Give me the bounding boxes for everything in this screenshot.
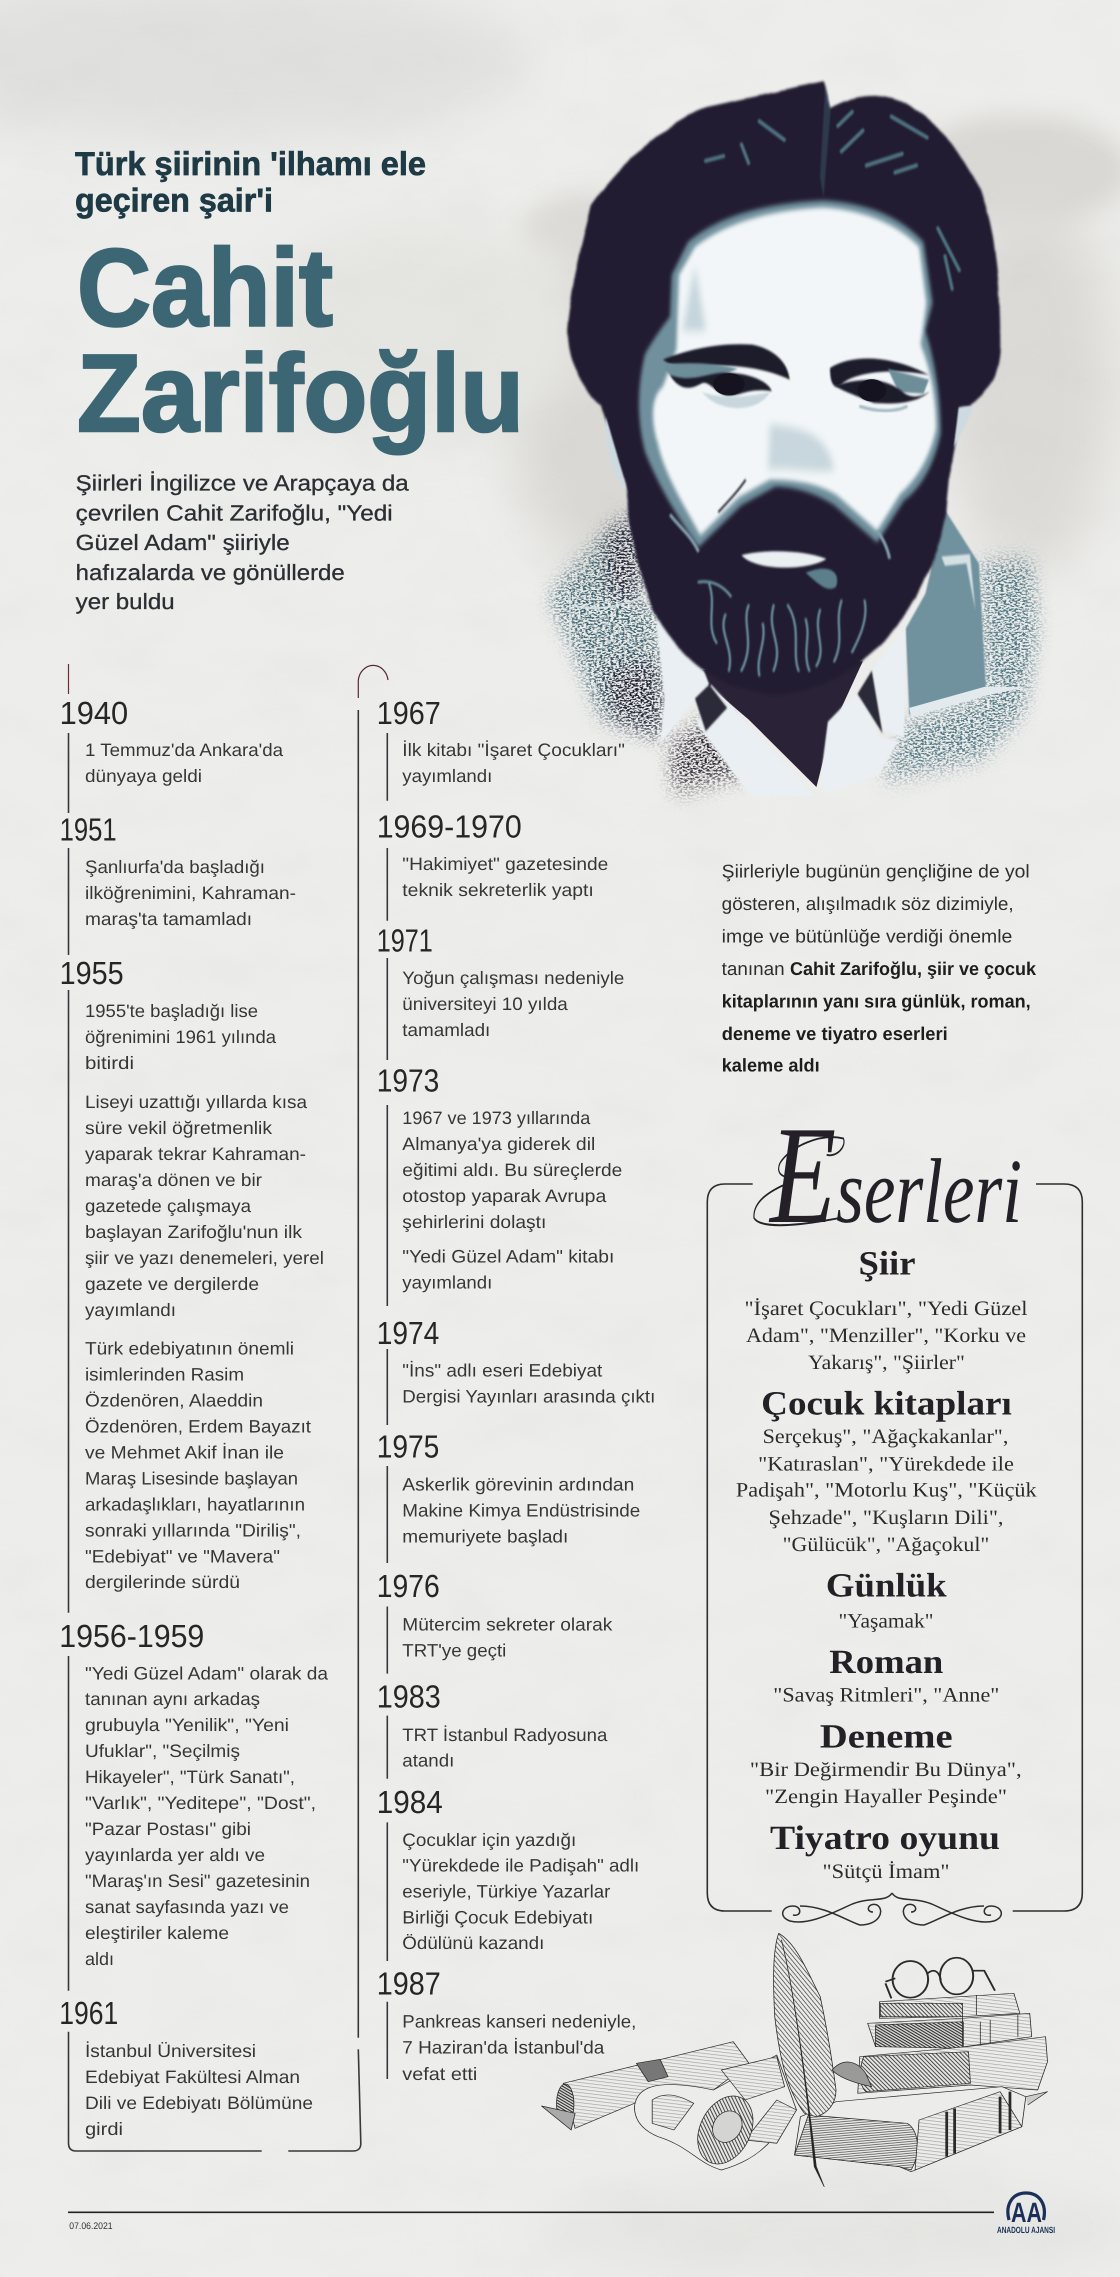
- year 1971: 1971: [377, 923, 433, 959]
- year 1956-1959: "Maraş'ın Sesi" gazetesinin: [85, 1871, 310, 1891]
- summary paragraph: Cahit Zarifoğlu, şiir ve çocuk: [790, 958, 1037, 979]
- year 1971: [377, 923, 624, 1040]
- date: 07.06.2021: [69, 2221, 113, 2232]
- shirt collars: [655, 605, 905, 796]
- year 1976: TRT'ye geçti: [402, 1640, 506, 1660]
- right eyebrow and eye: [830, 359, 930, 411]
- year 1955: bitirdi: [85, 1053, 134, 1073]
- year 1955: gazetede çalışmaya: [85, 1196, 252, 1216]
- summary paragraph: kitaplarının yanı sıra günlük, roman,: [722, 990, 1031, 1011]
- year 1983: [377, 1678, 608, 1771]
- year 1955: Liseyi uzattığı yıllarda kısa: [85, 1092, 308, 1112]
- category: Çocuk kitapları: Padişah", "Motorlu Kuş", "Küçük: [736, 1480, 1037, 1502]
- title: name: [77, 226, 524, 455]
- year 1967: İlk kitabı "İşaret Çocukları": [402, 740, 625, 760]
- year 1956-1959: yayınlarda yer aldı ve: [85, 1845, 265, 1865]
- collar shadows: [695, 671, 882, 733]
- year 1955: sonraki yıllarında "Diriliş",: [85, 1521, 301, 1541]
- ears: [606, 406, 973, 491]
- intro text: Şiirleri İngilizce ve Arapçaya da: [76, 471, 410, 496]
- year 1955: [60, 955, 324, 1592]
- year 1984: 1984: [377, 1784, 443, 1820]
- year 1967: yayımlandı: [402, 766, 492, 786]
- category: Çocuk kitapları: Serçekuş", "Ağaçkakanlar",: [763, 1426, 1008, 1448]
- headline: [75, 145, 426, 219]
- quill feather: [774, 1933, 872, 2187]
- year 1973: yayımlandı: [402, 1273, 492, 1293]
- intro text: hafızalarda ve gönüllerde: [76, 560, 345, 585]
- beard highlights: [699, 582, 865, 675]
- face: [639, 200, 941, 547]
- year 1967: 1967: [377, 695, 441, 731]
- logo: Anadolu Ajansı: ANADOLU AJANSI: [997, 2225, 1055, 2235]
- year 1955: yaparak tekrar Kahraman-: [85, 1144, 306, 1164]
- year 1955: öğrenimini 1961 yılında: [85, 1027, 277, 1047]
- year 1955: Özdenören, Alaeddin: [85, 1391, 263, 1411]
- panel: Eserleri: [707, 1098, 1082, 1925]
- category: Tiyatro oyunu: "Sütçü İmam": [822, 1861, 950, 1883]
- hair and beard mass: [567, 82, 1000, 694]
- year 1961: girdi: [85, 2119, 123, 2139]
- book stack: [858, 1993, 1048, 2093]
- year 1974: [377, 1315, 655, 1407]
- category: Deneme: Deneme: [820, 1718, 953, 1755]
- year 1955: "Edebiyat" ve "Mavera": [85, 1547, 280, 1567]
- year 1951: 1951: [60, 812, 117, 848]
- year 1955: dergilerinde sürdü: [85, 1572, 240, 1592]
- summary paragraph: gösteren, alışılmadık söz dizimiyle,: [722, 893, 1014, 914]
- year 1940: 1 Temmuz'da Ankara'da: [85, 740, 284, 760]
- category: Günlük: Günlük: [826, 1567, 947, 1604]
- year 1987: 7 Haziran'da İstanbul'da: [402, 2038, 605, 2058]
- year 1975: Makine Kimya Endüstrisinde: [402, 1501, 640, 1521]
- year 1984: Çocuklar için yazdığı: [402, 1830, 576, 1850]
- year 1987: [377, 1966, 636, 2084]
- title: name: Cahit: [77, 226, 333, 349]
- year 1987: 1987: [377, 1966, 441, 2002]
- glasses: [885, 1958, 995, 1998]
- year 1974: Dergisi Yayınları arasında çıktı: [402, 1387, 655, 1407]
- year 1974: 1974: [377, 1315, 439, 1351]
- year 1973: otostop yaparak Avrupa: [402, 1186, 607, 1206]
- year 1973: 1973: [377, 1063, 439, 1099]
- intro text: Güzel Adam" şiiriyle: [76, 530, 290, 555]
- year 1976: [377, 1568, 613, 1660]
- year 1956-1959: "Yedi Güzel Adam" olarak da: [85, 1663, 329, 1683]
- category: Deneme: "Bir Değirmendir Bu Dünya",: [750, 1759, 1022, 1781]
- category: Deneme: "Zengin Hayaller Peşinde": [765, 1786, 1007, 1808]
- category: Şiir: [744, 1245, 1028, 1374]
- year 1955: yayımlandı: [85, 1300, 176, 1320]
- year 1973: "Yedi Güzel Adam" kitabı: [402, 1247, 614, 1267]
- category: Tiyatro oyunu: [770, 1820, 1000, 1883]
- panel frame: [707, 1184, 1082, 1911]
- year 1983: TRT İstanbul Radyosuna: [402, 1725, 608, 1745]
- year 1987: Pankreas kanseri nedeniyle,: [402, 2012, 636, 2032]
- year 1951: maraş'ta tamamladı: [85, 909, 252, 929]
- year 1940: [60, 695, 284, 786]
- summary paragraph: Şiirleriyle bugünün gençliğine de yol: [722, 860, 1030, 881]
- year 1984: Birliği Çocuk Edebiyatı: [402, 1907, 593, 1927]
- right jacket: [906, 510, 986, 715]
- year 1984: eseriyle, Türkiye Yazarlar: [402, 1882, 610, 1902]
- year 1955: Maraş Lisesinde başlayan: [85, 1469, 298, 1489]
- year 1984: "Yürekdede ile Padişah" adlı: [402, 1856, 639, 1876]
- timeline rails: [68, 664, 388, 2151]
- summary paragraph: imge ve bütünlüğe verdiği önemle: [722, 926, 1012, 947]
- year 1973: 1967 ve 1973 yıllarında: [402, 1108, 591, 1128]
- year 1955: gazete ve dergilerde: [85, 1274, 259, 1294]
- category: Deneme: [750, 1718, 1022, 1808]
- year 1956-1959: 1956-1959: [59, 1618, 204, 1654]
- ornament: [783, 1893, 1001, 1925]
- year 1983: 1983: [377, 1678, 441, 1714]
- year 1969-1970: [377, 808, 608, 900]
- year 1984: [377, 1784, 639, 1953]
- year 1975: [377, 1428, 640, 1547]
- year 1961: İstanbul Üniversitesi: [85, 2041, 256, 2061]
- year 1961: 1961: [59, 1995, 118, 2031]
- year 1975: Askerlik görevinin ardından: [402, 1475, 634, 1495]
- year 1955: isimlerinden Rasim: [85, 1365, 244, 1385]
- year 1984: Ödülünü kazandı: [402, 1933, 544, 1953]
- year 1940: dünyaya geldi: [85, 766, 202, 786]
- heading: Eserleri script: Eserleri: [768, 1098, 1022, 1253]
- left eyebrow and eye: [663, 344, 790, 408]
- year 1955: ve Mehmet Akif İnan ile: [85, 1443, 284, 1463]
- forehead and nose tone: [682, 266, 706, 331]
- year 1973: eğitimi aldı. Bu süreçlerde: [402, 1160, 622, 1180]
- category: Çocuk kitapları: Çocuk kitapları: [761, 1385, 1012, 1422]
- moustache highlight and lip: [741, 551, 826, 568]
- intro text: çevrilen Cahit Zarifoğlu, "Yedi: [76, 500, 393, 526]
- year 1971: tamamladı: [402, 1020, 490, 1040]
- year 1976: Mütercim sekreter olarak: [402, 1615, 613, 1635]
- year 1974: "İns" adlı eseri Edebiyat: [402, 1361, 602, 1381]
- scrolls: [542, 2042, 796, 2170]
- summary paragraph: kaleme aldı: [722, 1055, 820, 1076]
- hair highlights: [706, 112, 959, 289]
- year 1961: [59, 1995, 313, 2139]
- left shoulder seam: [570, 591, 641, 652]
- category: Çocuk kitapları: [736, 1385, 1037, 1556]
- jacket speckle: [549, 517, 1038, 780]
- category: Günlük: [826, 1567, 947, 1633]
- category: Çocuk kitapları: Şehzade", "Kuşların Dili",: [768, 1507, 1004, 1529]
- dark speckle near collar: [606, 517, 749, 792]
- year 1956-1959: eleştiriler kaleme: [85, 1923, 229, 1943]
- summary paragraph: deneme ve tiyatro eserleri: [722, 1023, 948, 1044]
- year 1975: 1975: [377, 1428, 439, 1464]
- category: Roman: [773, 1644, 999, 1707]
- year 1955: maraş'a dönen ve bir: [85, 1170, 262, 1190]
- headline: geçiren şair'i: [75, 182, 273, 219]
- intro text: yer buldu: [76, 589, 175, 614]
- illustration: quill, scrolls, books and glasses: [542, 1933, 1048, 2187]
- year 1973: şehirlerini dolaştı: [402, 1212, 546, 1232]
- year 1955: Türk edebiyatının önemli: [85, 1339, 294, 1359]
- year 1975: memuriyete başladı: [402, 1527, 568, 1547]
- category: Şiir: Adam", "Menziller", "Korku ve: [746, 1325, 1026, 1347]
- year 1956-1959: Ufuklar", "Seçilmiş: [85, 1741, 240, 1761]
- year 1976: 1976: [377, 1568, 440, 1604]
- timeline column 1: [59, 695, 329, 2139]
- year 1956-1959: grubuyla "Yenilik", "Yeni: [85, 1715, 289, 1735]
- summary paragraph: [722, 860, 1037, 1076]
- neck shadow: [691, 661, 863, 787]
- year 1956-1959: aldı: [85, 1949, 114, 1969]
- year 1951: Şanlıurfa'da başladığı: [85, 857, 265, 877]
- year 1955: Özdenören, Erdem Bayazıt: [85, 1417, 311, 1437]
- category: Çocuk kitapları: "Gülücük", "Ağaçokul": [783, 1534, 989, 1556]
- logo: Anadolu Ajansı: AA: [1011, 2197, 1042, 2228]
- year 1956-1959: "Pazar Postası" gibi: [85, 1819, 251, 1839]
- year 1969-1970: teknik sekreterlik yaptı: [402, 880, 594, 900]
- year 1969-1970: "Hakimiyet" gazetesinde: [402, 854, 608, 874]
- year 1956-1959: Hikayeler", "Türk Sanatı",: [85, 1767, 295, 1787]
- category: Şiir: Şiir: [858, 1245, 916, 1282]
- year 1956-1959: [59, 1618, 329, 1969]
- year 1961: Edebiyat Fakültesi Alman: [85, 2067, 300, 2087]
- year 1973: [377, 1063, 622, 1293]
- year 1987: vefat etti: [402, 2064, 477, 2084]
- title: name: Zarifoğlu: [77, 332, 524, 455]
- year 1955: şiir ve yazı denemeleri, yerel: [85, 1248, 324, 1268]
- category: Roman: "Savaş Ritmleri", "Anne": [773, 1685, 999, 1707]
- year 1956-1959: sanat sayfasında yazı ve: [85, 1897, 289, 1917]
- category: Şiir: Yakarış", "Şiirler": [808, 1352, 965, 1374]
- logo: Anadolu Ajansı: [997, 2193, 1055, 2235]
- headline: Türk şiirinin 'ilhamı ele: [75, 145, 426, 182]
- year 1955: başlayan Zarifoğlu'nun ilk: [85, 1222, 303, 1242]
- lower large book: [795, 2087, 1048, 2172]
- year 1951: [60, 812, 296, 929]
- year 1971: Yoğun çalışması nedeniyle: [402, 968, 624, 988]
- year 1983: atandı: [402, 1751, 454, 1771]
- year 1955: 1955'te başladığı lise: [85, 1001, 258, 1021]
- summary paragraph: tanınan: [722, 958, 785, 979]
- year 1940: 1940: [60, 695, 128, 731]
- year 1969-1970: 1969-1970: [377, 808, 522, 844]
- category: Günlük: "Yaşamak": [838, 1611, 934, 1633]
- year 1956-1959: "Varlık", "Yeditepe", "Dost",: [85, 1793, 316, 1813]
- intro text: [76, 471, 410, 614]
- timeline column 2: [377, 695, 655, 2084]
- year 1955: süre vekil öğretmenlik: [85, 1118, 273, 1138]
- category: Roman: Roman: [829, 1644, 943, 1681]
- year 1955: 1955: [60, 955, 124, 991]
- year 1955: arkadaşlıkları, hayatlarının: [85, 1495, 305, 1515]
- year 1971: üniversiteyi 10 yılda: [402, 994, 569, 1014]
- footer rule: [68, 2211, 994, 2213]
- category: Çocuk kitapları: "Katıraslan", "Yürekdede ile: [758, 1453, 1014, 1475]
- year 1951: ilköğrenimini, Kahraman-: [85, 883, 296, 903]
- year 1967: [377, 695, 625, 786]
- year 1956-1959: tanınan aynı arkadaş: [85, 1689, 260, 1709]
- category: Şiir: "İşaret Çocukları", "Yedi Güzel: [744, 1298, 1028, 1320]
- category: Tiyatro oyunu: Tiyatro oyunu: [770, 1820, 1000, 1857]
- portrait of Cahit Zarifoğlu: [549, 82, 1038, 796]
- year 1973: Almanya'ya giderek dil: [402, 1134, 595, 1154]
- year 1961: Dili ve Edebiyatı Bölümüne: [85, 2093, 313, 2113]
